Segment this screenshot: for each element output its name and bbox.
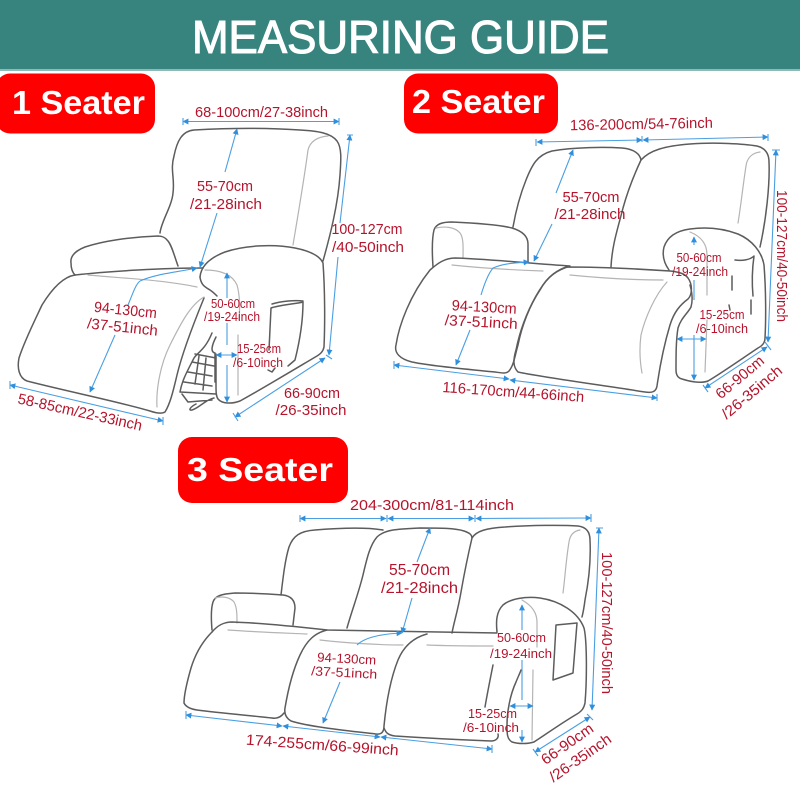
dimension labels: /37-51inch [86,315,159,340]
dimension labels: 55-70cm [562,189,620,206]
dimension labels: 50-60cm [497,630,546,645]
illustration: single recliner [10,104,404,435]
dimension labels: 174-255cm/66-99inch [245,732,399,759]
dimension labels: 66-90cm [538,720,597,768]
dimension labels: 58-85cm/22-33inch [16,391,144,435]
dimension labels: 15-25cm [468,706,517,721]
title banner: MEASURING GUIDE [192,11,609,63]
dimension labels: 66-90cm [712,352,768,403]
illustration: three-seat recliner sofa [184,497,615,786]
panel: 1 seater [0,74,404,435]
dimension labels: 100-127cm [332,221,402,238]
dimension labels: /6-10inch [696,322,748,336]
dimension labels [16,104,404,435]
dimension labels: /21-28inch [554,206,626,223]
recliner mechanism [180,333,216,410]
dimension labels [442,115,790,423]
dimension labels: /26-35inch [276,402,346,419]
dimension labels: 66-90cm [284,385,340,402]
dimension labels: 94-130cm [93,299,158,322]
panel: 2 seater [394,74,790,423]
dimension labels: /37-51inch [444,312,518,333]
dimension labels: /40-50inch [332,239,404,256]
badge: 2 Seater: 2 Seater [412,83,545,120]
measurement arrows [186,514,603,756]
dimension labels: 100-127cm/40-50inch [773,190,790,322]
dimension labels: /6-10inch [233,356,283,370]
badge: 2 Seater [404,74,558,134]
dimension labels: /19-24inch [204,310,260,324]
dimension labels: 204-300cm/81-114inch [350,497,514,514]
dimension labels: /6-10inch [463,720,519,735]
illustration: two-seat recliner sofa [394,115,790,423]
dimension labels: 55-70cm [197,178,253,195]
dimension labels: 50-60cm [676,251,722,265]
dimension labels: 94-130cm [451,297,517,318]
dimension labels: 94-130cm [317,649,377,668]
panel: 3 seater [178,437,615,786]
badge: 3 Seater: 3 Seater [187,451,333,488]
measurement arrows [394,134,780,401]
dimension labels: /37-51inch [311,663,378,682]
dimension labels: 15-25cm [700,308,744,322]
dimension labels: 116-170cm/44-66inch [442,379,585,406]
dimension labels: 100-127cm/40-50inch [598,552,615,694]
badge: 1 Seater [0,74,155,134]
title banner [0,0,800,71]
dimension labels: 136-200cm/54-76inch [570,115,713,134]
dimension labels [245,497,615,786]
dimension labels: /19-24inch [672,265,728,279]
dimension labels: 15-25cm [237,342,281,356]
dimension labels: 68-100cm/27-38inch [195,104,328,121]
dimension labels: /21-28inch [190,196,262,213]
badge: 3 Seater [178,437,348,503]
dimension labels: /19-24inch [490,646,552,661]
dimension labels: /26-35inch [718,362,786,423]
measurement arrows [10,118,353,425]
dimension labels: /21-28inch [381,580,458,597]
dimension labels: 55-70cm [389,562,450,579]
badge: 1 Seater: 1 Seater [12,84,145,121]
dimension labels: 50-60cm [211,297,255,311]
dimension labels: /26-35inch [546,731,615,786]
